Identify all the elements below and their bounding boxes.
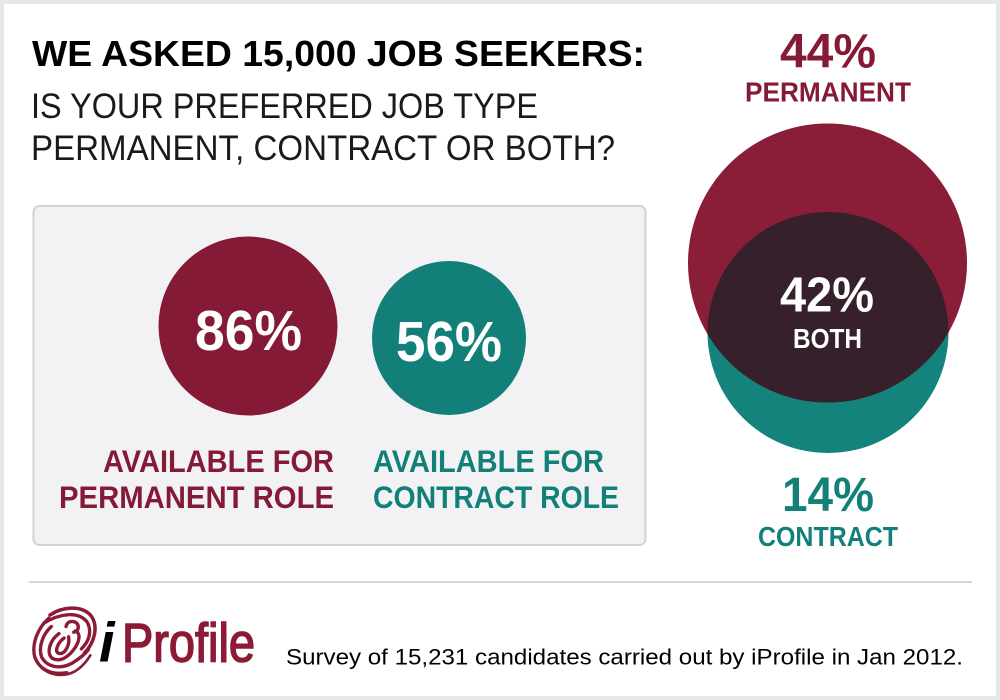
title: WE ASKED 15,000 JOB SEEKERS: bbox=[32, 33, 645, 74]
title bbox=[31, 33, 645, 168]
contract role label bbox=[373, 443, 619, 515]
survey note: Survey of 15,231 candidates carried out by iProfile in Jan 2012. bbox=[286, 644, 963, 670]
panel: availability bbox=[34, 206, 646, 545]
permanent role label: PERMANENT ROLE bbox=[59, 479, 334, 515]
contract result label: CONTRACT bbox=[758, 521, 898, 552]
permanent result label: 44% bbox=[780, 26, 876, 78]
contract result label bbox=[758, 469, 898, 552]
contract role label: CONTRACT ROLE bbox=[373, 479, 619, 515]
both label: BOTH bbox=[793, 323, 862, 354]
wordmark: i bbox=[99, 610, 116, 674]
contract availability circle bbox=[372, 261, 526, 415]
contract result label: 14% bbox=[782, 469, 874, 522]
title: IS YOUR PREFERRED JOB TYPE bbox=[31, 87, 538, 126]
iProfile logo bbox=[34, 608, 255, 675]
contract availability circle: 56% bbox=[396, 310, 502, 374]
permanent availability circle: 86% bbox=[195, 299, 302, 363]
permanent role label bbox=[59, 443, 334, 515]
both label: 42% bbox=[780, 268, 874, 322]
venn diagram bbox=[688, 124, 967, 453]
permanent result label bbox=[745, 26, 911, 108]
both label bbox=[780, 268, 874, 354]
permanent role label: AVAILABLE FOR bbox=[103, 443, 334, 479]
wordmark: Profile bbox=[122, 612, 255, 674]
icon: fingerprint bbox=[34, 608, 95, 675]
title: PERMANENT, CONTRACT OR BOTH? bbox=[31, 129, 615, 168]
contract role label: AVAILABLE FOR bbox=[373, 443, 604, 479]
permanent result label: PERMANENT bbox=[745, 76, 911, 108]
permanent availability circle bbox=[158, 236, 338, 416]
